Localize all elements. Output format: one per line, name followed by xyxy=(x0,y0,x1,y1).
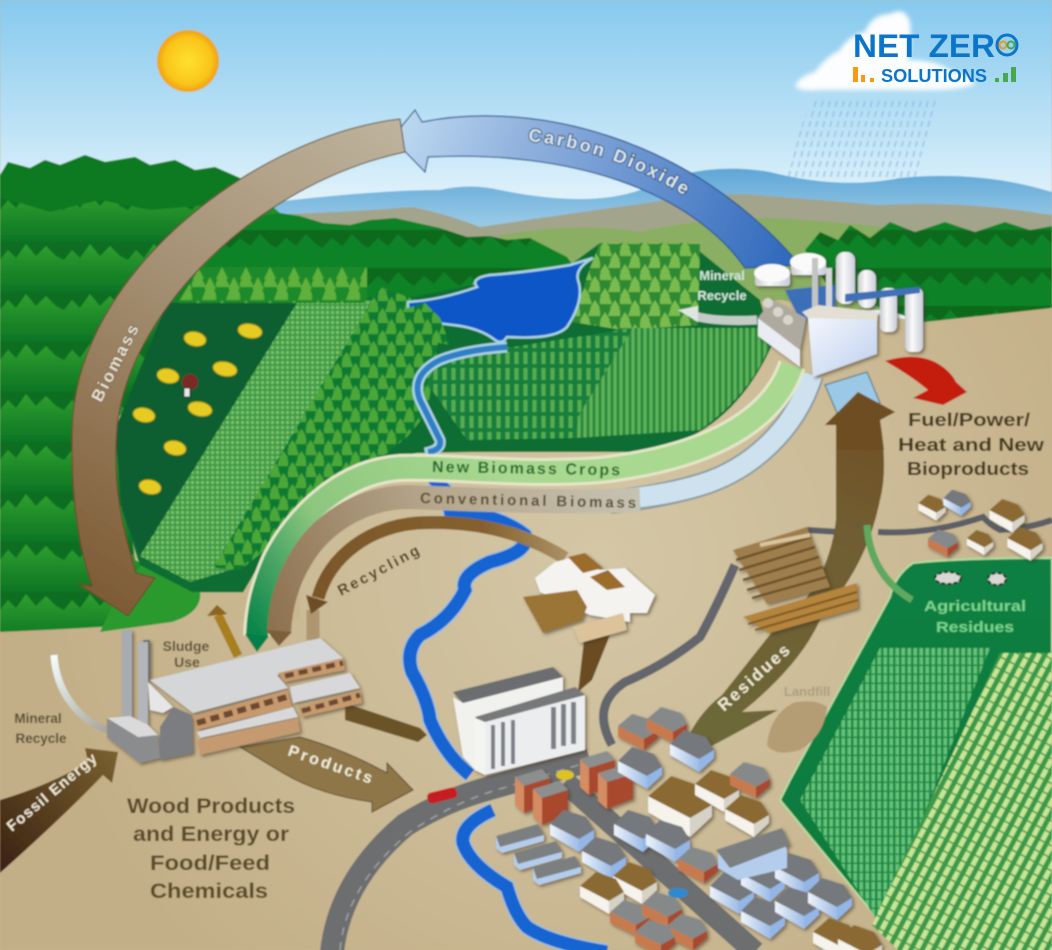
distant mountains xyxy=(250,169,1052,310)
conventional biomass arrow xyxy=(266,490,640,646)
right crop field xyxy=(780,558,1052,950)
rain xyxy=(782,98,940,178)
forest behind the lake xyxy=(167,213,572,305)
carbon dioxide arrow xyxy=(400,108,794,270)
mineral recycle arrow left xyxy=(54,655,108,730)
trees overlapping lake xyxy=(400,303,450,345)
landfill xyxy=(767,684,830,753)
sky xyxy=(0,0,1052,330)
label: Agricultural Residues: Residues xyxy=(936,619,1014,636)
label: Sludge Use: Use xyxy=(174,654,200,670)
label: Sludge Use xyxy=(163,638,210,670)
label: New Biomass Crops: New Biomass Crops xyxy=(432,459,620,479)
left forest top row xyxy=(0,155,240,212)
label: Biomass: Biomass xyxy=(88,321,143,405)
label: Carbon Dioxide: Carbon Dioxide xyxy=(528,127,689,196)
label: Wood Products and Energy or Food/Feed Chemicals xyxy=(127,795,295,903)
products arrow xyxy=(240,737,413,812)
label: Conventional Biomass: Conventional Biomass xyxy=(420,490,636,512)
logo green bars xyxy=(995,67,1016,82)
big arrow head to factory xyxy=(825,392,895,450)
tree block beside lake xyxy=(572,243,700,330)
crop field xyxy=(427,328,770,440)
sun xyxy=(157,30,219,92)
new biomass crops arrow xyxy=(245,365,792,652)
field with bales xyxy=(115,303,297,556)
lumber stacks xyxy=(733,527,858,633)
logo subtitle: SOLUTIONS xyxy=(881,66,987,86)
label: Wood Products and Energy or Food/Feed Chemicals: Food/Feed xyxy=(150,852,270,875)
mineral recycle arrow top xyxy=(678,306,757,322)
red output arrow xyxy=(885,357,967,405)
mill to office arrow xyxy=(345,703,427,742)
hay bales xyxy=(132,322,263,496)
icon: cows xyxy=(935,572,1006,585)
sludge use arrow xyxy=(207,605,238,656)
office building xyxy=(453,667,585,775)
label: Mineral Recycle left xyxy=(14,711,67,746)
recycling stub xyxy=(306,610,320,640)
sawmill xyxy=(523,553,655,643)
label: Agricultural Residues xyxy=(924,598,1026,636)
right forest xyxy=(805,222,1052,323)
light blue feed under factory xyxy=(825,372,880,413)
logo wordmark: NET ZER xyxy=(853,28,995,64)
light blue band fill xyxy=(610,375,812,500)
logo orange bars xyxy=(853,67,874,82)
fossil energy arrow xyxy=(0,748,118,873)
light blue conventional band xyxy=(610,375,812,502)
label: Residues: Residues xyxy=(714,641,794,715)
central dark green fields xyxy=(115,243,773,592)
label: Fuel/Power/Heat and New Bioproducts: Fuel/Power/ xyxy=(908,410,1030,430)
fine grid field xyxy=(140,300,380,582)
cloud xyxy=(795,11,975,90)
recycling arrow xyxy=(306,522,565,614)
row of trees behind plantation xyxy=(178,267,367,303)
label: Mineral Recycle top: Mineral xyxy=(699,268,745,283)
sawmill to office arrow xyxy=(578,635,610,692)
logo: Net Zero Solutions xyxy=(853,28,1017,86)
label: Landfill: Landfill xyxy=(784,684,830,699)
lake and stream xyxy=(408,258,593,453)
new biomass crops rim xyxy=(257,365,792,636)
agricultural residues arrow xyxy=(867,525,912,600)
red car xyxy=(426,787,458,804)
label: Agricultural Residues: Agricultural xyxy=(924,598,1026,615)
village houses xyxy=(918,490,1043,561)
label: Fuel/Power/Heat and New Bioproducts: Bioproducts xyxy=(907,459,1029,479)
blue car xyxy=(668,888,688,898)
label: Fossil Energy: Fossil Energy xyxy=(4,750,101,835)
yellow car xyxy=(556,770,574,780)
label: Fuel/Power/Heat and New Bioproducts: Heat and New xyxy=(898,435,1045,455)
label: Recycling: Recycling xyxy=(335,542,422,600)
mill building xyxy=(107,630,362,763)
bright forest patch xyxy=(100,563,200,632)
icon: tractor xyxy=(182,374,198,397)
label: Mineral Recycle top xyxy=(697,268,747,303)
label: Mineral Recycle top: Recycle xyxy=(697,288,747,303)
logo infinity circle xyxy=(997,35,1017,55)
label: Mineral Recycle left: Mineral xyxy=(14,711,62,726)
residues arrow xyxy=(688,392,895,748)
label: Wood Products and Energy or Food/Feed Chemicals: Chemicals xyxy=(150,880,268,903)
road network xyxy=(332,517,1052,950)
label: Mineral Recycle left: Recycle xyxy=(15,731,67,746)
lower river xyxy=(410,478,607,950)
label: Wood Products and Energy or Food/Feed Chemicals: Wood Products xyxy=(127,795,295,818)
tree plantation xyxy=(213,287,453,570)
label: Sludge Use: Sludge xyxy=(163,638,210,654)
town houses xyxy=(496,707,882,950)
left forest xyxy=(0,155,413,632)
label: Products: Products xyxy=(286,743,375,787)
biomass arrow xyxy=(72,119,405,616)
biorefinery xyxy=(754,252,923,377)
label: Fuel/Power/Heat and New Bioproducts xyxy=(898,410,1045,479)
label: Wood Products and Energy or Food/Feed Chemicals: and Energy or xyxy=(133,823,289,846)
ground xyxy=(0,300,1052,950)
